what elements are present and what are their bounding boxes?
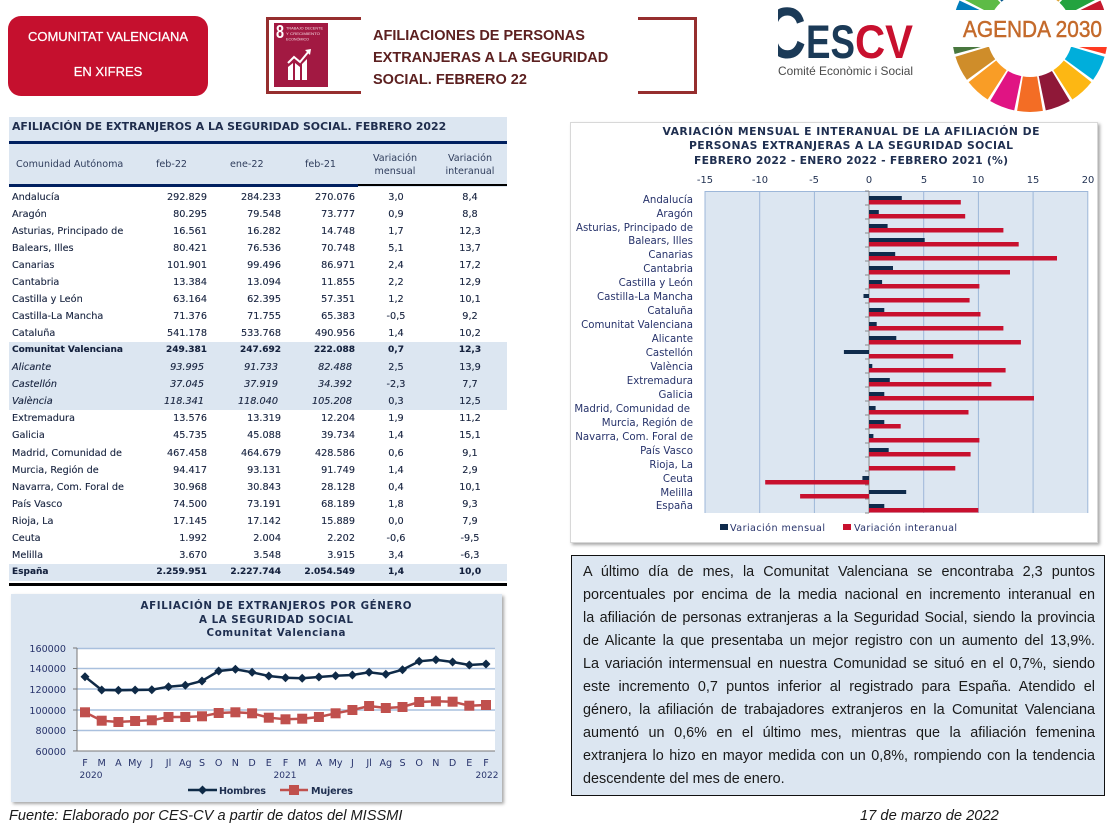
category labels: Melilla: [660, 488, 693, 499]
table rows: Canarias: [12, 260, 54, 270]
table rows: 1,8: [388, 498, 404, 510]
text block: commentary: extranjera lo hizo en mayor medida con un 0,8%, rompiendo con la tendencia: [583, 748, 1095, 764]
table rows: 7,7: [462, 378, 478, 390]
table title: [9, 117, 507, 141]
table rows: Andalucía: [12, 192, 60, 202]
table rows: 464.679: [241, 448, 281, 458]
month labels: [80, 758, 498, 781]
table rows: 490.956: [315, 328, 355, 338]
table header: Comunidad Autónoma: [16, 159, 123, 170]
table rows: 17.145: [173, 516, 207, 526]
month labels: S: [399, 758, 406, 769]
table header: Variación: [373, 153, 417, 164]
category labels: País Vasco: [640, 445, 693, 457]
table rows: 28.128: [321, 482, 355, 492]
panel: line chart card: [11, 594, 502, 802]
table rows: Madrid, Comunidad de: [12, 448, 122, 458]
category labels: València: [650, 361, 693, 373]
y axis labels: 100000: [29, 706, 66, 717]
table rows: 2.259.951: [156, 566, 207, 576]
table rows: 101.901: [167, 260, 207, 270]
logo: CES CV: [778, 7, 913, 75]
table rows: 13.094: [247, 276, 281, 288]
text block: commentary: porcentuales por encima de la media nacional en incremento interanual en: [583, 587, 1095, 603]
table rows: 12,3: [459, 226, 481, 236]
table rows: 91.733: [244, 362, 278, 372]
table rows: 93.131: [247, 464, 281, 476]
table rows: Galicia: [12, 430, 45, 441]
table rows: Melilla: [12, 550, 43, 560]
category labels: Galicia: [659, 390, 693, 401]
table rows: 0,6: [388, 448, 404, 458]
table rows: 93.995: [170, 362, 204, 372]
table rows: 13.319: [247, 412, 281, 424]
month labels: F: [283, 758, 288, 769]
table rows: 71.755: [247, 310, 281, 322]
month labels: 2020: [80, 771, 103, 781]
table rows: 118.341: [164, 396, 204, 406]
table rows: 39.734: [321, 430, 355, 441]
x axis labels: 5: [921, 175, 927, 186]
text block: commentary: A último día de mes, la Comunitat Valenciana se encontraba 2,3 puntos: [583, 564, 1095, 580]
table rows: 13,9: [459, 362, 481, 372]
table rows: 105.208: [312, 396, 352, 406]
table rows: 1,4: [388, 430, 404, 441]
table rows: 91.749: [321, 464, 355, 476]
table rows: 3.670: [179, 550, 207, 560]
text block: commentary: de Alicante la que presentaba un mejor registro con un aumento del 13,9%.: [583, 633, 1095, 649]
table rows: 2,5: [388, 362, 404, 372]
table rows: Balears, Illes: [12, 242, 74, 254]
table rows: España: [12, 566, 49, 576]
month labels: My: [329, 758, 343, 769]
table rows: 270.076: [315, 192, 355, 202]
y axis labels: 80000: [35, 726, 66, 737]
category labels: Castellón: [646, 347, 693, 359]
table header: [9, 141, 507, 187]
month labels: D: [449, 758, 456, 769]
category labels: Cataluña: [647, 306, 693, 317]
category labels: Comunitat Valenciana: [581, 320, 693, 331]
table header: ene-22: [230, 159, 264, 170]
table rows: 57.351: [321, 294, 355, 304]
line chart title: A LA SEGURIDAD SOCIAL: [199, 614, 353, 626]
table rows: 2.202: [327, 532, 355, 544]
table rows: 76.536: [247, 242, 281, 254]
table rows: 1,7: [388, 226, 404, 236]
month labels: E: [466, 758, 472, 769]
table rows: -9,5: [461, 532, 479, 544]
table rows: 3,0: [388, 192, 404, 202]
text block: commentary: este incremento 0,7 puntos inferior al registrado para España. Atendido el: [583, 679, 1095, 695]
text block: commentary: aumentó un 0,6% en el último mes, mientras que la afiliación femenina: [583, 725, 1095, 741]
line chart title: [140, 599, 412, 639]
table rows: 533.768: [241, 328, 281, 338]
table rows: 1.992: [179, 532, 207, 544]
table rows: Aragón: [12, 208, 47, 220]
table rows: 11.855: [321, 276, 355, 288]
table rows: País Vasco: [12, 498, 62, 510]
heading: main title: SOCIAL. FEBRERO 22: [373, 72, 527, 88]
monthly variation bars: [844, 196, 925, 508]
month labels: My: [128, 758, 142, 769]
table rows: Asturias, Principado de: [12, 226, 123, 236]
month labels: S: [199, 758, 205, 769]
icon: SDG 8 decent work and economic growth: Y CRECIMIENTO: [286, 31, 320, 36]
logo: CES CV: ES: [806, 15, 855, 68]
series: Hombres: [80, 655, 490, 695]
month labels: Ag: [379, 758, 392, 769]
table rows: 12,5: [459, 396, 481, 406]
month labels: O: [215, 758, 223, 769]
line chart title: Comunitat Valenciana: [206, 627, 346, 639]
table rows: -0,6: [387, 532, 405, 544]
category labels: Castilla y León: [619, 277, 693, 289]
category labels: Madrid, Comunidad de: [574, 404, 690, 415]
table rows: Cantabria: [12, 276, 59, 288]
table rows: 2,9: [462, 464, 478, 476]
icon: SDG 8 decent work and economic growth: ECONÓMICO: [286, 36, 309, 42]
table rows: 7,9: [462, 516, 478, 526]
table rows: 45.088: [247, 430, 281, 441]
table rows: 1,4: [388, 328, 404, 338]
month labels: N: [232, 758, 239, 769]
text block: commentary: la afiliación de personas extranjeras a la Seguridad Social, siendo la provincia: [583, 610, 1095, 626]
annual variation bars: [765, 200, 1057, 512]
table rows: 3.915: [327, 550, 355, 560]
table rows: 94.417: [173, 464, 207, 476]
table title: AFILIACIÓN DE EXTRANJEROS A LA SEGURIDAD SOCIAL. FEBRERO 2022: [12, 120, 446, 133]
category labels: Rioja, La: [649, 460, 693, 471]
series: Mujeres: [80, 696, 491, 727]
category labels: Castilla-La Mancha: [597, 292, 693, 303]
table rows: Extremadura: [12, 412, 75, 424]
table rows: 284.233: [241, 192, 281, 202]
x axis labels: 0: [866, 175, 872, 186]
month labels: D: [248, 758, 256, 769]
category labels: Alicante: [652, 334, 693, 345]
table rows: 30.843: [247, 482, 281, 492]
heading: main title: AFILIACIONES DE PERSONAS: [373, 28, 585, 44]
table rows: 16.561: [173, 226, 207, 236]
category labels: Asturias, Principado de: [576, 223, 693, 234]
table rows: -6,3: [461, 550, 479, 560]
table rows: 10,0: [459, 566, 481, 576]
bar chart legend: Variación mensual: [730, 522, 825, 534]
table rows: 10,1: [459, 294, 481, 304]
table rows: 74.500: [173, 498, 207, 510]
table rows: 0,9: [388, 208, 404, 220]
table rows: 9,1: [462, 448, 478, 458]
logo: CES CV: Comité Econòmic i Social: [778, 64, 913, 78]
chart title: PERSONAS EXTRANJERAS A LA SEGURIDAD SOCIAL: [689, 139, 1013, 152]
chart title: FEBRERO 2022 - ENERO 2022 - FEBRERO 2021 (%): [694, 154, 1008, 167]
table header: interanual: [446, 166, 494, 177]
bar chart legend: Variación interanual: [854, 522, 957, 534]
table rows: 37.919: [244, 378, 278, 390]
table rows: 1,2: [388, 294, 404, 304]
table rows: Rioja, La: [12, 516, 53, 526]
table rows: 17.142: [247, 516, 281, 526]
table rows: 1,4: [388, 464, 404, 476]
table rows: -2,3: [387, 378, 405, 390]
badge: Comunitat Valenciana en xifres: COMUNITAT VALENCIANA: [28, 29, 188, 44]
table rows: 12,9: [459, 276, 481, 288]
table rows: 99.496: [247, 260, 281, 270]
table rows: 73.191: [247, 498, 281, 510]
table rows: 0,0: [388, 516, 404, 526]
table rows: 37.045: [170, 378, 204, 390]
table rows: 12,3: [459, 344, 481, 354]
table rows: 82.488: [318, 362, 352, 372]
date: 17 de marzo de 2022: [860, 808, 999, 824]
table rows: 63.164: [173, 294, 207, 304]
x axis labels: 10: [972, 175, 984, 186]
category labels: Navarra, Com. Foral de: [575, 432, 693, 443]
table rows: 2.054.549: [304, 566, 355, 576]
table rows: 8,4: [462, 192, 478, 202]
table rows: 0,7: [388, 344, 404, 354]
badge: Comunitat Valenciana en xifres: EN XIFRES: [74, 64, 142, 79]
table header: mensual: [375, 166, 415, 177]
table rows: Castilla y León: [12, 294, 83, 304]
table rows: 2,2: [388, 276, 404, 288]
line chart legend: Hombres: [219, 786, 266, 797]
table rows: 10,1: [459, 482, 481, 492]
table rows: 1,9: [388, 412, 404, 424]
table rows: 428.586: [315, 448, 355, 458]
logo: Agenda 2030 wheel: AGENDA 2030: [963, 16, 1102, 42]
table rows: 2.227.744: [230, 566, 281, 576]
icon: SDG 8 decent work and economic growth: 8: [276, 22, 284, 42]
table header: Variación: [448, 153, 492, 164]
x axis labels: -15: [697, 175, 713, 186]
month labels: N: [432, 758, 439, 769]
category labels: Ceuta: [663, 474, 693, 485]
table rows: Castellón: [12, 378, 57, 390]
x axis labels: 20: [1082, 175, 1094, 186]
panel: bar chart card: [570, 122, 1098, 543]
month labels: Jl: [165, 758, 171, 769]
chart title: VARIACIÓN MENSUAL E INTERANUAL DE LA AFILIACIÓN DE: [662, 125, 1040, 138]
table rows: 13,7: [459, 242, 481, 254]
month labels: M: [298, 758, 306, 769]
table rows: 68.189: [321, 498, 355, 510]
table rows: 2.004: [253, 532, 281, 544]
month labels: F: [82, 758, 88, 769]
table rows: 9,2: [462, 310, 478, 322]
table rows: Navarra, Com. Foral de: [12, 482, 124, 492]
category labels: Murcia, Región de: [602, 417, 693, 429]
table rows: 3,4: [388, 550, 404, 560]
table rows: 292.829: [167, 192, 207, 202]
x axis labels: 15: [1027, 175, 1039, 186]
heading: main title: [373, 28, 608, 88]
text block: commentary: [571, 555, 1105, 796]
y axis labels: 160000: [29, 644, 66, 655]
table rows: 247.692: [240, 344, 281, 354]
badge: Comunitat Valenciana en xifres: [8, 16, 208, 96]
month labels: A: [316, 758, 323, 769]
category labels: Aragón: [656, 208, 693, 220]
table rows: 8,8: [462, 208, 478, 220]
table rows: 222.088: [314, 344, 355, 354]
table rows: 16.282: [247, 226, 281, 236]
category labels: Canarias: [648, 250, 693, 261]
table rows: 5,1: [388, 242, 404, 254]
x axis labels: [697, 175, 1094, 186]
table rows: 34.392: [318, 378, 352, 390]
table rows: 12.204: [321, 412, 355, 424]
month labels: Jl: [365, 758, 372, 769]
table rows: 467.458: [167, 448, 207, 458]
table rows: Castilla-La Mancha: [12, 310, 103, 322]
table rows: 0,4: [388, 482, 404, 492]
table header: feb-22: [156, 159, 187, 170]
x axis labels: -5: [809, 175, 819, 186]
table header: feb-21: [305, 159, 336, 170]
category labels: Balears, Illes: [628, 236, 693, 247]
text block: commentary: La variación intermensual en nuestra Comunidad se situó en el 0,7%, siendo: [583, 656, 1095, 672]
table rows: València: [12, 396, 53, 406]
table rows: 73.777: [321, 208, 355, 220]
table rows: 2,4: [388, 260, 404, 270]
chart title: [662, 125, 1040, 167]
table rows: Comunitat Valenciana: [12, 344, 123, 354]
line chart legend: Mujeres: [311, 786, 353, 797]
y axis labels: 140000: [29, 664, 66, 675]
table rows: Ceuta: [12, 532, 41, 544]
table rows: 13.384: [173, 276, 207, 288]
table rows: 10,2: [459, 328, 481, 338]
table rows: 86.971: [321, 260, 355, 270]
table rows: 11,2: [459, 412, 481, 424]
month labels: O: [415, 758, 423, 769]
category labels: Andalucía: [643, 194, 693, 206]
table rows: 13.576: [173, 412, 207, 424]
month labels: J: [149, 758, 153, 769]
icon: SDG 8 decent work and economic growth: TRABAJO DECENTE: [286, 26, 323, 30]
source note: Fuente: Elaborado por CES-CV a partir de datos del MISSMI: [9, 808, 402, 824]
table rows: 15.889: [321, 516, 355, 526]
table rows: 71.376: [173, 310, 207, 322]
month labels: 2021: [274, 771, 296, 781]
table rows: 30.968: [173, 482, 207, 492]
table rows: Alicante: [12, 362, 51, 372]
line chart title: AFILIACIÓN DE EXTRANJEROS POR GÉNERO: [140, 599, 412, 612]
table rows: 65.383: [321, 310, 355, 322]
table rows: 118.040: [238, 396, 278, 406]
table rows: 17,2: [459, 260, 481, 270]
month labels: J: [350, 758, 354, 769]
table rows: 79.548: [247, 208, 281, 220]
heading: main title: EXTRANJERAS A LA SEGURIDAD: [373, 50, 608, 66]
table rows: -0,5: [387, 310, 405, 322]
category labels: [574, 194, 693, 512]
month labels: 2022: [476, 771, 498, 781]
table rows: 0,3: [388, 396, 404, 406]
table rows: 80.295: [173, 208, 207, 220]
month labels: M: [98, 758, 106, 769]
table bottom rule: [9, 583, 507, 586]
table rows: 249.381: [166, 344, 207, 354]
table rows: Murcia, Región de: [12, 464, 99, 476]
x axis labels: -10: [752, 175, 768, 186]
table rows: 541.178: [167, 328, 207, 338]
panel: data table: [9, 117, 507, 586]
table rows: Cataluña: [12, 328, 55, 338]
logo: CES CV: CV: [855, 15, 914, 68]
category labels: España: [656, 501, 693, 512]
table rows: 15,1: [459, 430, 481, 441]
text block: commentary: descendente del mes de enero.: [583, 771, 785, 787]
table rows: 14.748: [321, 226, 355, 236]
month labels: E: [266, 758, 272, 769]
text block: commentary: género, la afiliación de trabajadores extranjeros en la Comunitat Valenciana: [583, 702, 1095, 718]
month labels: A: [115, 758, 122, 769]
y axis labels: 120000: [29, 685, 66, 696]
table rows: 62.395: [247, 294, 281, 304]
table rows: 3.548: [253, 550, 281, 560]
month labels: F: [483, 758, 489, 769]
table rows: 45.735: [173, 430, 207, 441]
table rows: 1,4: [388, 566, 404, 576]
table rows: 9,3: [462, 498, 478, 510]
category labels: Extremadura: [627, 376, 693, 387]
month labels: Ag: [179, 758, 192, 769]
category labels: Cantabria: [643, 264, 693, 275]
table rows: 80.421: [173, 242, 207, 254]
line chart legend: [188, 785, 353, 797]
table rows: [9, 192, 507, 581]
y axis labels: [29, 644, 66, 758]
bar chart legend: [720, 522, 957, 534]
table rows: 70.748: [321, 242, 355, 254]
y axis labels: 60000: [35, 747, 66, 758]
